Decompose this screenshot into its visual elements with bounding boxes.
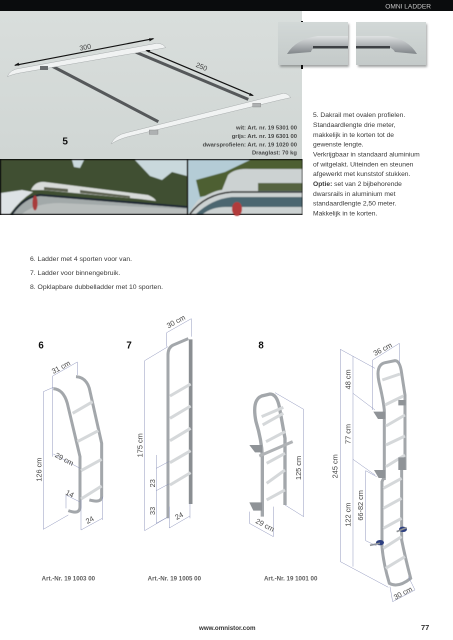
- ladder 6: 24: [84, 514, 95, 526]
- ladder 6: 31 cm: [50, 358, 72, 376]
- description text: 5. Dakrail met ovalen profielen.: [313, 112, 405, 119]
- ladder 7: 175 cm: [136, 433, 145, 457]
- description text: dwarsrails in aluminium met: [313, 191, 396, 198]
- article numbers: grijs: Art. nr. 19 6301 00: [232, 134, 297, 140]
- ladder list text: [30, 256, 163, 291]
- ladder 6 dimensions: [43, 362, 102, 530]
- inset: rail end left: [278, 22, 349, 67]
- ladder 7: 24: [173, 510, 185, 522]
- blue clamps: [376, 527, 407, 545]
- article number 7: Art.-Nr. 19 1005 00: [148, 575, 202, 582]
- article number 8: Art.-Nr. 19 1001 00: [264, 575, 318, 582]
- ladder list text: 7. Ladder voor binnengebruik.: [30, 270, 120, 277]
- description text: standaardlengte 2,50 meter.: [313, 200, 396, 208]
- description text: of witgelakt. Uiteinden en steunen: [313, 162, 414, 168]
- description text: Standaardlengte drie meter,: [313, 122, 396, 129]
- description text: makkelijk in te korten tot de: [313, 132, 394, 139]
- double ladder: 122 cm: [344, 503, 353, 527]
- double ladder: 36 cm: [372, 340, 394, 358]
- header bar: OMNI LADDER: [385, 4, 431, 10]
- double ladder: [331, 340, 415, 602]
- ladder 7: [42, 313, 202, 582]
- number 8 and folded ladder: [249, 341, 318, 582]
- ladder 6 frame: [53, 377, 102, 512]
- registration ticks: [301, 21, 303, 69]
- description text: gewenste lengte.: [313, 142, 364, 148]
- rear rail: [7, 43, 166, 77]
- folded ladder dimensions: [249, 393, 304, 537]
- ladder list text: 6. Ladder met 4 sporten voor van.: [30, 256, 132, 263]
- cross profiles: [50, 50, 248, 122]
- double ladder: 48 cm: [344, 369, 353, 389]
- description text: [313, 112, 420, 218]
- panel: roof rail product image: [0, 11, 302, 159]
- number 8 and folded ladder: 125 cm: [294, 456, 303, 480]
- inset: rail end right: [356, 22, 427, 67]
- ladder 7: 7: [126, 341, 132, 352]
- article numbers: Draaglast: 70 kg: [252, 151, 297, 157]
- article numbers: wit: Art. nr. 19 5301 00: [235, 126, 297, 132]
- article number 6: Art.-Nr. 19 1003 00: [42, 575, 96, 582]
- dimension arrows: [15, 39, 253, 95]
- ladder 7: 33: [148, 507, 157, 515]
- ladder 7: 30 cm: [165, 313, 187, 330]
- double ladder: 245 cm: [331, 454, 340, 478]
- number 8 and folded ladder: 8: [258, 341, 264, 352]
- article numbers: dwarsprofielen: Art. nr. 19 1020 00: [203, 142, 297, 148]
- header bar: [0, 0, 453, 11]
- ladder 6: 6: [38, 341, 44, 352]
- description text: Verkrijgbaar in standaard aluminium: [313, 152, 420, 158]
- double ladder dimensions: [340, 343, 415, 602]
- double ladder: 66-82 cm: [356, 490, 365, 521]
- double ladder: 30 cm: [392, 584, 414, 602]
- description text: afgewerkt met kunststof stukken.: [313, 171, 411, 178]
- panel: roof rail product image: 300: [79, 44, 92, 53]
- number 5: 5: [62, 136, 68, 147]
- ladder list text: 8. Opklapbare dubbelladder met 10 sporten.: [30, 284, 163, 291]
- ladder 7 dimensions: [145, 319, 191, 531]
- ladder 6: 126 cm: [35, 458, 44, 482]
- ladder 7 frame: [168, 339, 191, 518]
- description text: Makkelijk in te korten.: [313, 210, 377, 218]
- ladder 7: 23: [148, 479, 157, 487]
- double ladder frame: [373, 361, 411, 585]
- front rail: [111, 93, 291, 144]
- panel: roof rail product image: 250: [195, 62, 208, 73]
- number 8 and folded ladder: 29 cm: [254, 516, 276, 534]
- folded ladder frame: [249, 394, 293, 517]
- description text: Optie: set van 2 bijbehorende: [313, 181, 402, 188]
- ladder 6: 29 cm: [53, 450, 75, 468]
- double ladder: 77 cm: [344, 424, 353, 444]
- footer website: www.omnistor.com: [198, 625, 256, 632]
- page number: 77: [421, 623, 429, 632]
- article numbers: [203, 126, 297, 157]
- photo: rail on caravan wide: [0, 159, 188, 215]
- ladder 6: 14: [64, 488, 75, 500]
- ladder 6: [35, 341, 102, 530]
- photo: rail on caravan close: [188, 159, 302, 216]
